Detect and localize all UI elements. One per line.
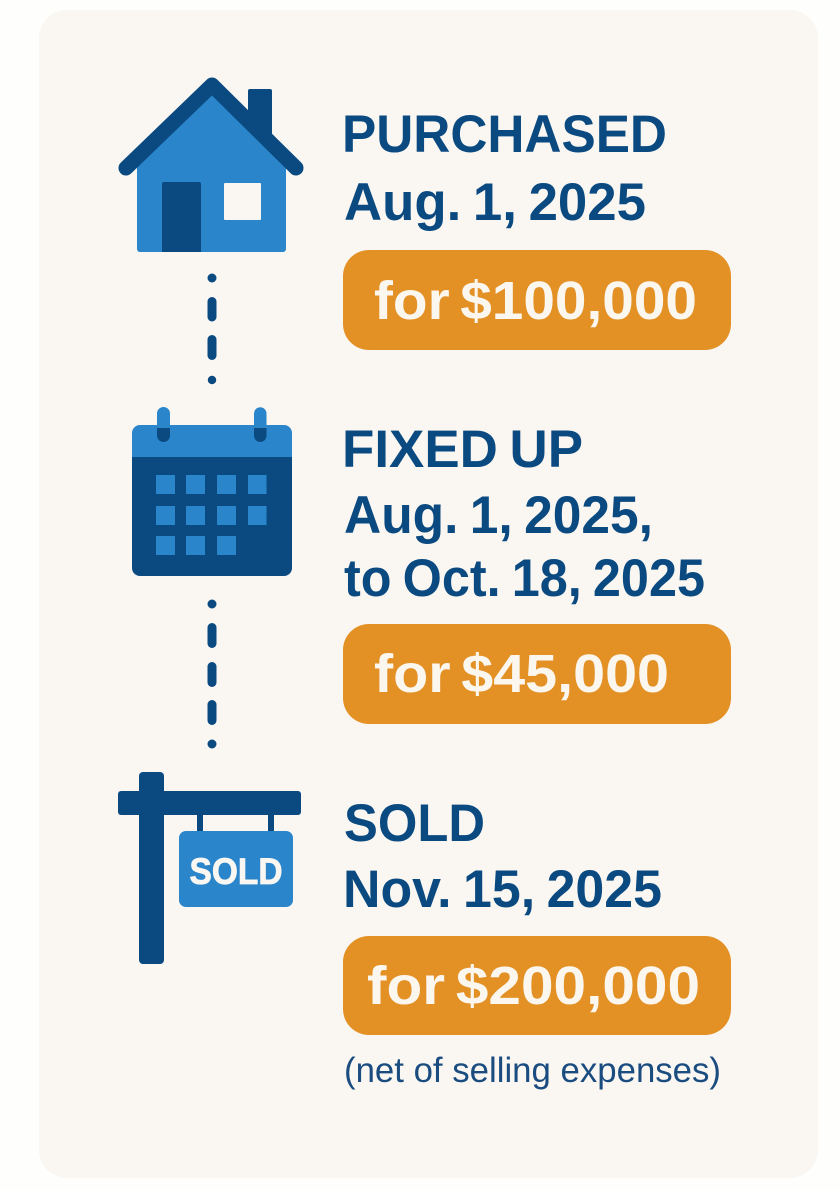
footnote: net of selling expenses: (net of selling expenses) bbox=[344, 1051, 721, 1090]
price badge: purchased bbox=[343, 250, 731, 350]
date: purchased: Aug. 1, 2025 bbox=[344, 173, 646, 232]
heading: purchased: PURCHASED bbox=[342, 105, 667, 164]
date: sold: Nov. 15, 2025 bbox=[343, 860, 662, 919]
step: sold bbox=[343, 794, 731, 1090]
connector: dashed line from calendar to sign bbox=[208, 600, 216, 748]
heading: fixed up: FIXED UP bbox=[342, 420, 583, 479]
step: fixed up bbox=[342, 420, 731, 724]
price badge: sold bbox=[343, 936, 731, 1035]
price badge: purchased: for $100,000 bbox=[374, 271, 697, 331]
icon: sold sign: SOLD bbox=[190, 851, 282, 892]
price badge: fixed up bbox=[343, 624, 731, 724]
icon: calendar bbox=[132, 407, 292, 576]
date line one: fixed up: Aug. 1, 2025, bbox=[344, 486, 653, 545]
price badge: sold: for $200,000 bbox=[367, 956, 700, 1016]
connector: dashed line from house to calendar bbox=[208, 274, 216, 384]
heading: sold: SOLD bbox=[344, 794, 485, 853]
date line two: fixed up: to Oct. 18, 2025 bbox=[344, 549, 705, 608]
step: purchased bbox=[342, 105, 731, 350]
icon: sold sign bbox=[118, 772, 301, 964]
icon: house bbox=[126, 85, 296, 252]
price badge: fixed up: for $45,000 bbox=[374, 644, 669, 704]
